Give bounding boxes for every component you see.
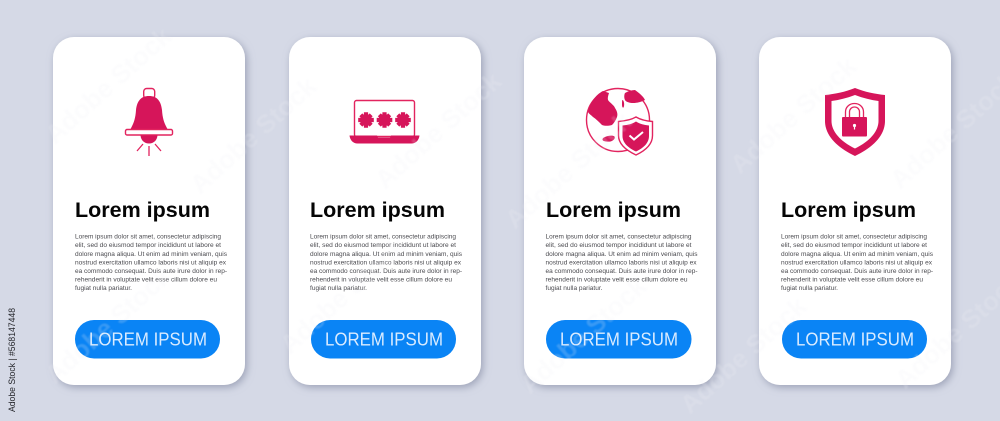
icon: shield with padlock (825, 88, 885, 156)
panel: card 1 (53, 37, 245, 385)
text block: fugiat nulla pariatur. (310, 285, 367, 292)
icon: laptop with password (350, 100, 420, 144)
watermark: Adobe Stock (184, 70, 323, 199)
watermark: Adobe Stock (369, 65, 508, 194)
text block: nostrud exercitation ullamco laboris nisi ut aliquip ex (546, 259, 697, 266)
button: LOREM IPSUM (796, 328, 914, 350)
button: LOREM IPSUM (560, 328, 678, 350)
text block: rehenderit in voluptate velit esse cillum dolore eu (781, 277, 924, 284)
text block (310, 234, 462, 292)
text block: Lorem ipsum dolor sit amet, consectetur adipiscing (781, 234, 928, 240)
text block: rehenderit in voluptate velit esse cillum dolore eu (546, 277, 688, 284)
button: LOREM IPSUM (89, 328, 207, 350)
text block: fugiat nulla pariatur. (546, 285, 603, 292)
text block: Lorem ipsum dolor sit amet, consectetur adipiscing (546, 234, 692, 240)
button (782, 320, 927, 358)
text block: ea commodo consequat. Duis aute irure dolor in rep- (781, 268, 933, 275)
panel: card 4 (759, 37, 951, 385)
text block (781, 234, 933, 292)
icon: bell (126, 88, 172, 156)
heading: Lorem ipsum (781, 198, 916, 222)
heading: Lorem ipsum (75, 198, 210, 222)
text block: elit, sed do eiusmod tempor incididunt ut labore et (310, 242, 456, 249)
panel: card 3 (524, 37, 716, 385)
text block: elit, sed do eiusmod tempor incididunt ut labore et (781, 242, 927, 249)
text block: ea commodo consequat. Duis aute irure dolor in rep- (310, 268, 462, 275)
text block: ea commodo consequat. Duis aute irure dolor in rep- (75, 268, 227, 275)
text block: fugiat nulla pariatur. (781, 285, 838, 292)
stock id label: Adobe Stock | #568147448 (7, 308, 18, 412)
text block: dolore magna aliqua. Ut enim ad minim veniam, quis (546, 251, 698, 258)
watermark: Adobe Stock (514, 270, 653, 399)
button (311, 320, 456, 358)
icon: globe with shield (586, 88, 652, 155)
text block: nostrud exercitation ullamco laboris nisi ut aliquip ex (781, 259, 933, 266)
heading: Lorem ipsum (546, 198, 681, 222)
heading: Lorem ipsum (310, 198, 445, 222)
text block: dolore magna aliqua. Ut enim ad minim veniam, quis (75, 251, 227, 258)
watermark: Adobe Stock (674, 290, 813, 419)
text block (75, 234, 227, 292)
watermark: Adobe Stock (274, 230, 413, 359)
text block: dolore magna aliqua. Ut enim ad minim veniam, quis (310, 251, 462, 258)
button: LOREM IPSUM (325, 328, 443, 350)
button (546, 320, 692, 358)
text block: rehenderit in voluptate velit esse cillum dolore eu (75, 277, 218, 284)
watermark: Adobe Stock (39, 20, 178, 149)
text block: nostrud exercitation ullamco laboris nisi ut aliquip ex (75, 259, 227, 266)
text block: dolore magna aliqua. Ut enim ad minim veniam, quis (781, 251, 933, 258)
text block: nostrud exercitation ullamco laboris nisi ut aliquip ex (310, 259, 462, 266)
text block (546, 234, 698, 292)
watermark: Adobe Stock (499, 105, 638, 234)
text block: Lorem ipsum dolor sit amet, consectetur adipiscing (75, 234, 222, 240)
button (75, 320, 220, 358)
text block: rehenderit in voluptate velit esse cillum dolore eu (310, 277, 453, 284)
text block: elit, sed do eiusmod tempor incididunt ut labore et (75, 242, 221, 249)
panel: card 2 (289, 37, 481, 385)
text block: ea commodo consequat. Duis aute irure dolor in rep- (546, 268, 698, 275)
text block: Lorem ipsum dolor sit amet, consectetur adipiscing (310, 234, 457, 240)
text block: elit, sed do eiusmod tempor incididunt ut labore et (546, 242, 692, 249)
watermark: Adobe Stock (39, 260, 178, 389)
text block: fugiat nulla pariatur. (75, 285, 132, 292)
watermark: Adobe Stock (724, 50, 863, 179)
